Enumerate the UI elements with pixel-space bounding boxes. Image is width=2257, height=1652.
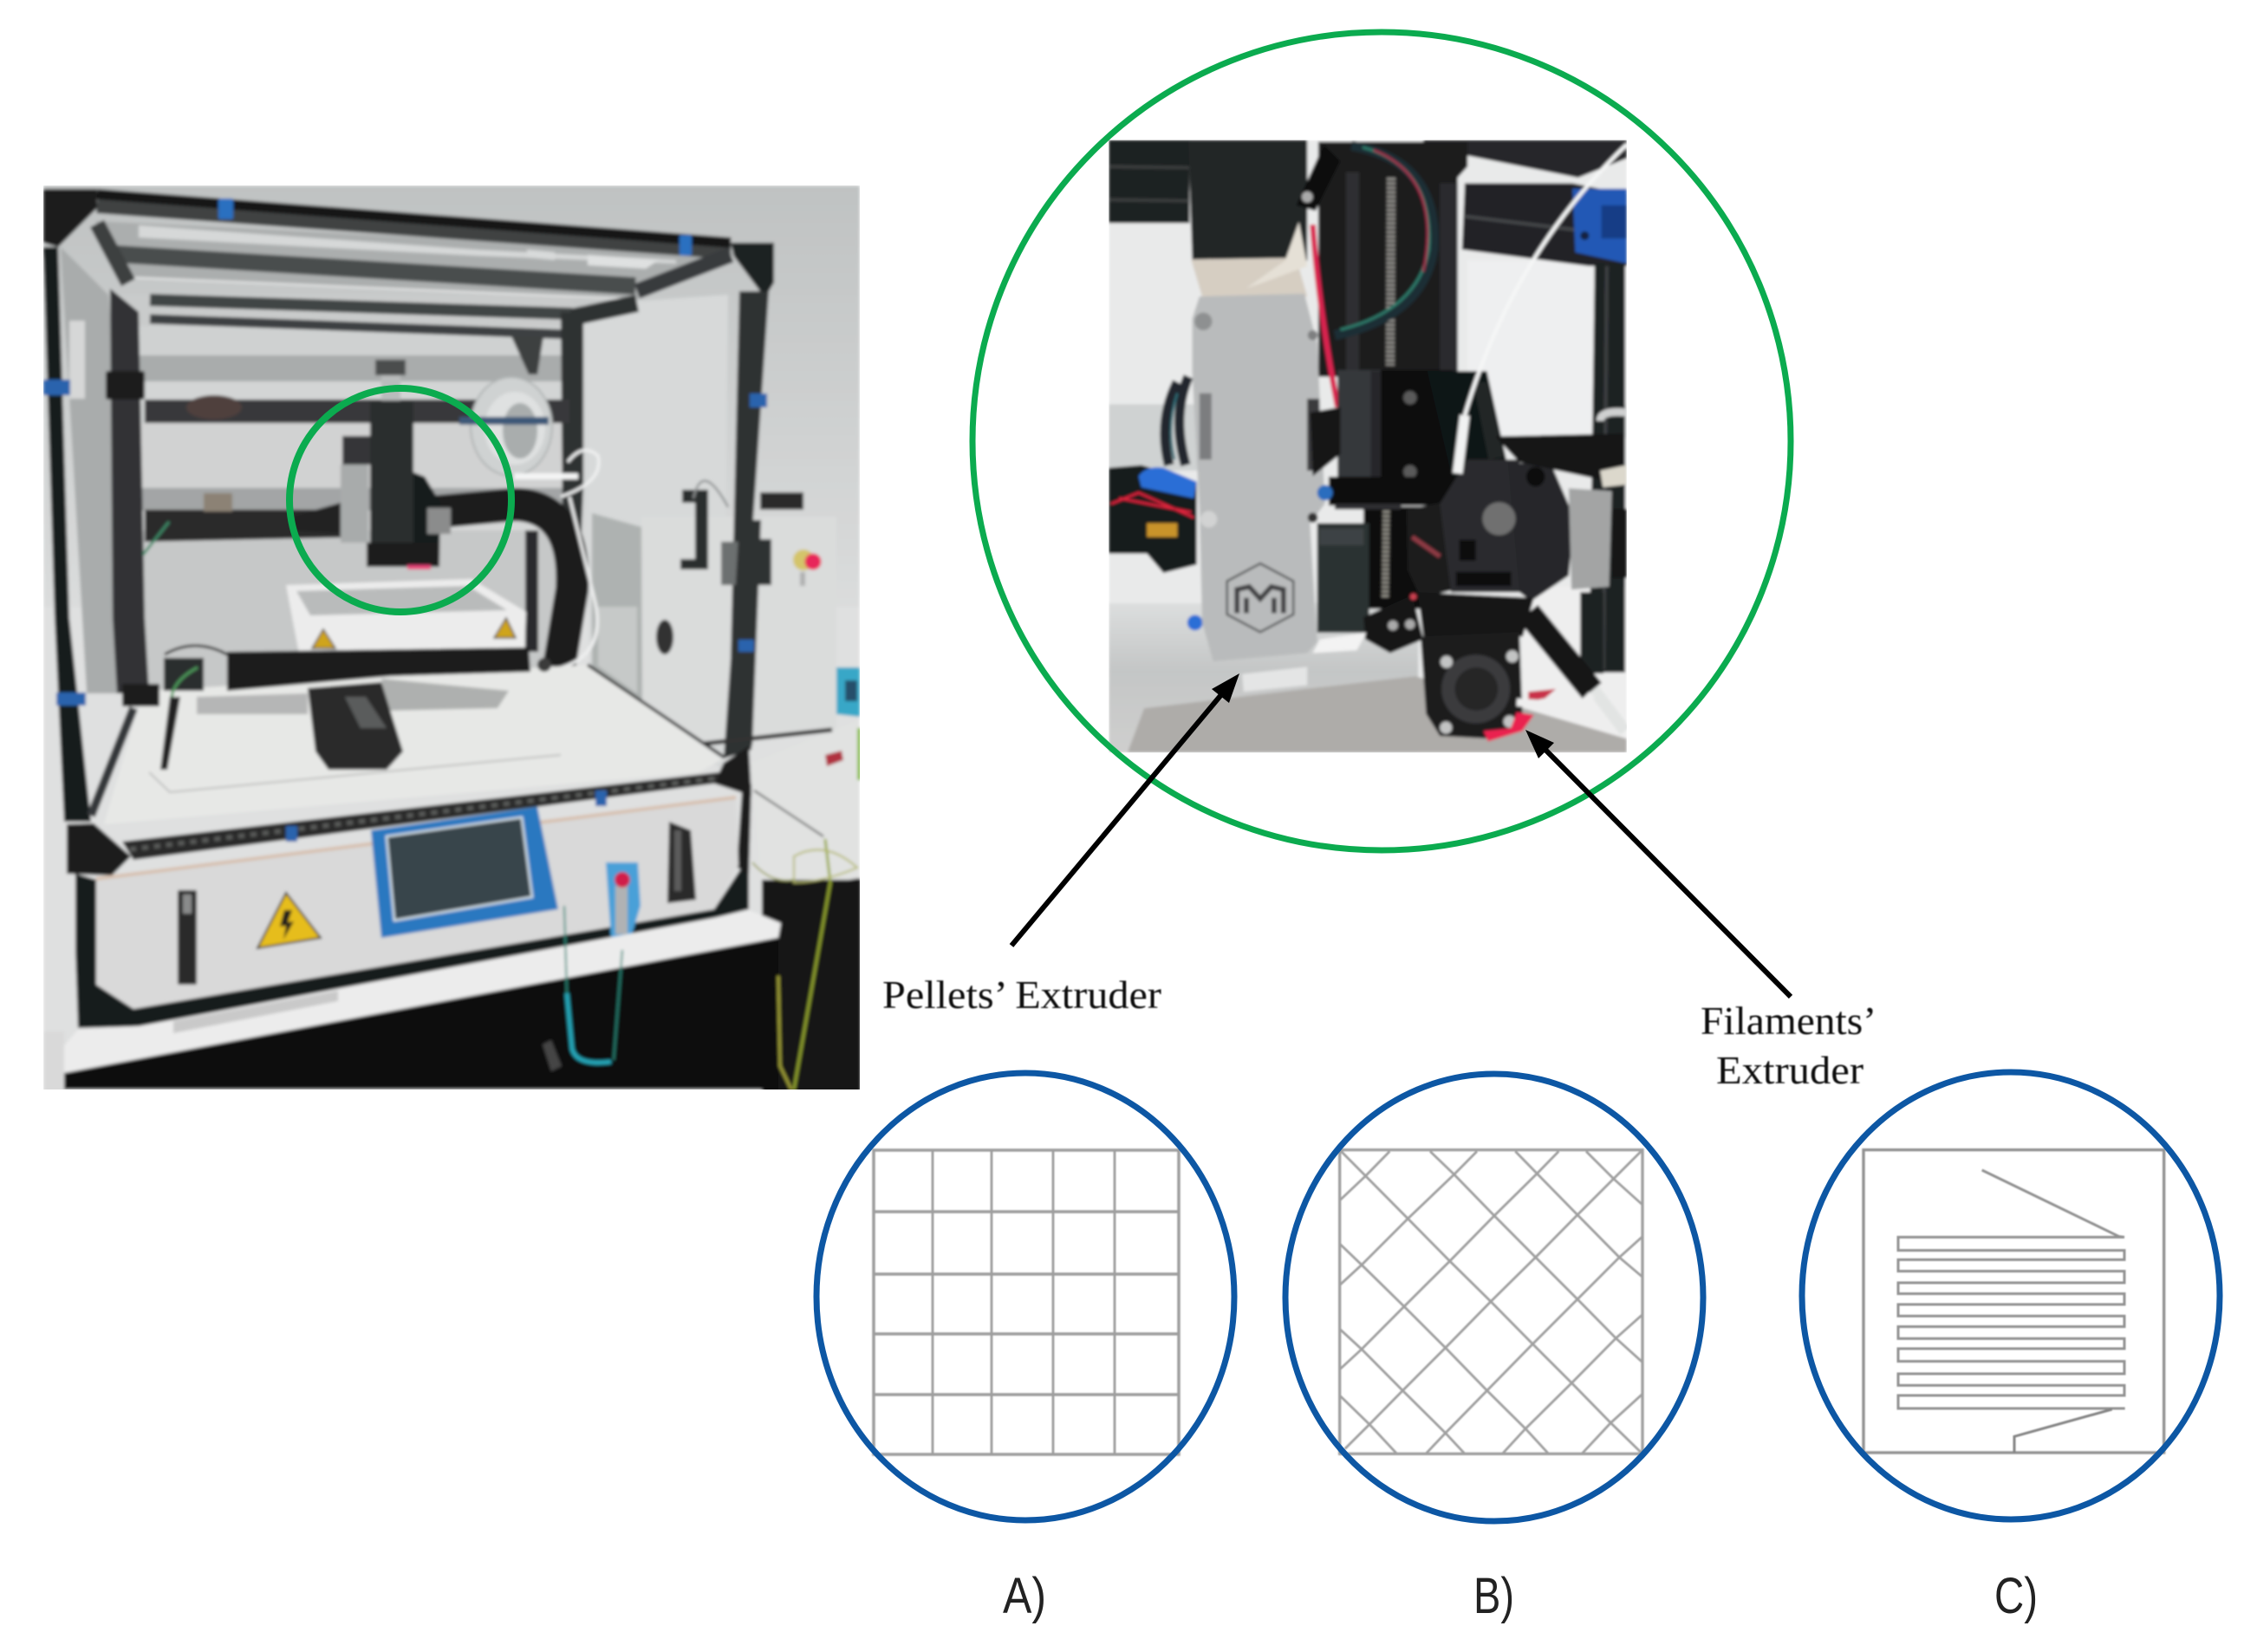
rear interior bands (113, 295, 572, 329)
bed (1128, 676, 1627, 752)
gantry (227, 647, 530, 691)
large green circle (972, 32, 1791, 850)
electronics details (656, 620, 673, 654)
fan block and bracket (1337, 370, 1381, 483)
photo: extruder close-up (1109, 140, 1627, 752)
front frame (75, 868, 749, 1028)
left cables (1109, 465, 1197, 573)
back beams (145, 400, 569, 423)
spool (471, 377, 552, 476)
diagonal pattern (1340, 1150, 1642, 1454)
panel C: serpentine infill (1802, 1072, 2220, 1519)
blue circle (816, 1073, 1234, 1520)
panel B: diagonal infill (1285, 1074, 1703, 1521)
electronics box behind glass (641, 517, 836, 744)
photo: printer enclosure (43, 185, 862, 1092)
column (1318, 142, 1467, 377)
floor of enclosure (139, 664, 720, 796)
fan (1421, 632, 1523, 738)
lower stepper (1317, 524, 1369, 633)
arrow: filaments' extruder (1525, 730, 1791, 997)
bed (286, 579, 526, 654)
beams (1109, 140, 1189, 223)
serpentine pattern (1863, 1150, 2164, 1453)
caption C: C) (1994, 1568, 2038, 1624)
right glass and door (583, 295, 728, 771)
motor (1188, 140, 1307, 261)
top glass and beams (95, 221, 737, 299)
left glass side (61, 249, 120, 695)
grid pattern (874, 1150, 1179, 1454)
small green highlight circle (289, 388, 511, 612)
panel A: grid infill (816, 1073, 1234, 1520)
table (62, 910, 781, 1073)
filament (1465, 145, 1627, 415)
gap behind body with lead screw (1363, 506, 1424, 608)
blue brackets (218, 198, 233, 219)
label: pellets' extruder: Pellets’ Extruder (882, 972, 1161, 1017)
extruder body (1406, 501, 1454, 596)
corrugated tube and rail (1591, 686, 1627, 733)
control panel (735, 851, 742, 868)
small lit glass strips on right (527, 250, 555, 260)
cables (567, 993, 611, 1063)
silver plate (1193, 294, 1325, 661)
label: filaments' extruder: Extruder (1716, 1048, 1863, 1092)
caption B: B) (1473, 1568, 1514, 1624)
right desk items (751, 719, 860, 894)
dark cabinet (64, 938, 778, 1089)
sensor block (1363, 595, 1423, 653)
arrow: pellets' extruder (1011, 673, 1239, 946)
caption A: A) (1003, 1568, 1046, 1624)
chain and right stepper (1495, 433, 1625, 479)
blue circle (1285, 1074, 1703, 1521)
blue circle (1802, 1072, 2220, 1519)
label: filaments' extruder: Filaments’ (1701, 998, 1876, 1043)
posts (43, 247, 91, 822)
extruder carriage (375, 360, 406, 375)
label: filaments' extruder (1701, 998, 1876, 1092)
